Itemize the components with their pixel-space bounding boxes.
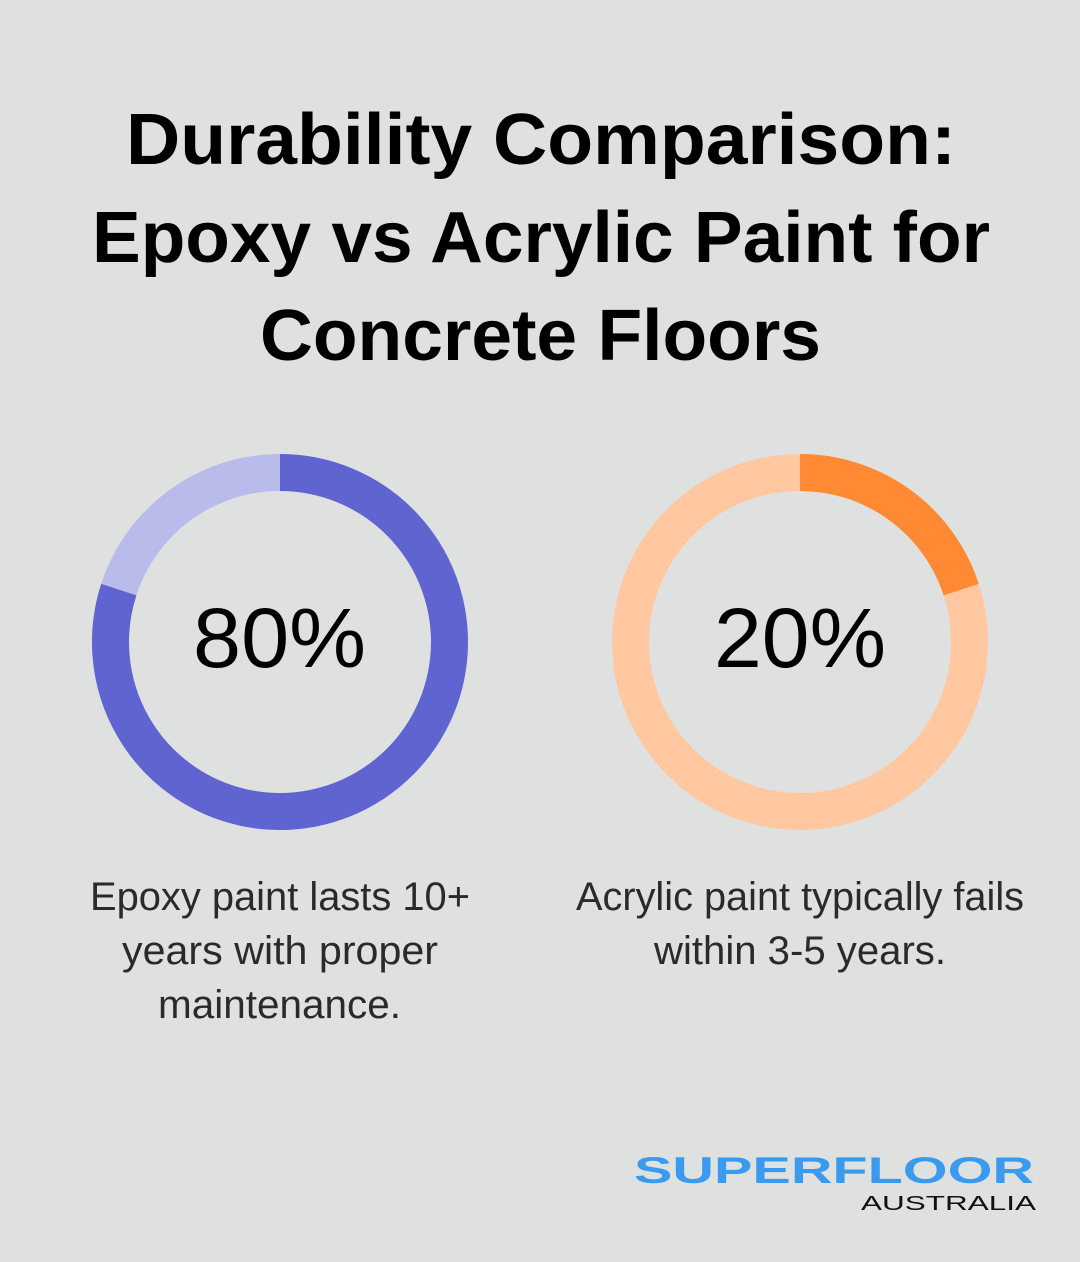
stat: 80%: 80% — [193, 591, 366, 685]
caption: acrylic: Acrylic paint typically fails — [576, 875, 1024, 919]
stat: 20%: 20% — [714, 591, 886, 685]
title: Epoxy vs Acrylic Paint for — [92, 198, 990, 278]
title: Durability Comparison: — [126, 100, 956, 180]
title: Concrete Floors — [260, 296, 821, 376]
logo: Superfloor Australia: SUPERFLOOR — [634, 1150, 1034, 1191]
logo: Superfloor Australia — [634, 1150, 1037, 1215]
caption: epoxy: Epoxy paint lasts 10+ — [90, 875, 470, 919]
caption: epoxy: maintenance. — [158, 983, 401, 1027]
caption: epoxy: years with proper — [122, 929, 438, 973]
title — [92, 100, 990, 376]
panel: epoxy — [90, 472, 470, 1027]
donut chart: epoxy 80% — [110, 472, 449, 812]
donut chart: acrylic 20% — [630, 472, 970, 812]
caption: epoxy — [90, 875, 470, 1027]
panel: acrylic — [576, 472, 1024, 973]
logo: Superfloor Australia: AUSTRALIA — [861, 1192, 1037, 1215]
caption: acrylic — [576, 875, 1024, 973]
caption: acrylic: within 3-5 years. — [653, 929, 946, 973]
